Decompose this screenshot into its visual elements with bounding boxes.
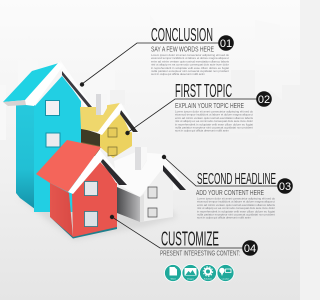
red side wall (50, 183, 73, 237)
subheading: SAY A FEW WORDS HERE (151, 44, 214, 54)
badge 01: 01 (220, 38, 232, 50)
shadow under houses (18, 195, 178, 240)
red front wall (72, 162, 117, 237)
body text: enim ad minim veniam quis nostrud exercitation ullamco laboris (175, 116, 254, 120)
body text: eiusmod tempor incididunt ut labore et dolore magna aliqua ut (175, 113, 253, 117)
callout line 3 (162, 155, 280, 186)
body text: enim ad minim veniam quis nostrud exercitation ullamco laboris (151, 59, 230, 63)
subheading: EXPLAIN YOUR TOPIC HERE (175, 101, 244, 110)
blue fascia (25, 62, 63, 106)
body text: sunt in culpa qui officia deserunt mollit anim (197, 216, 252, 220)
body text: nulla pariatur excepteur sint occaecat cupidatat non proident (175, 126, 253, 130)
white windows (148, 187, 157, 217)
heading: FIRST TOPIC (175, 81, 232, 101)
yellow windows (108, 128, 117, 156)
icon: document: Word (171, 278, 175, 280)
red underside edge (50, 217, 117, 238)
subheading: PRESENT INTERESTING CONTENT: (160, 248, 240, 258)
badge 04: 04 (244, 243, 256, 255)
badge 02: 02 (258, 94, 270, 106)
blue windows (46, 100, 60, 116)
body text: nulla pariatur excepteur sint occaecat cupidatat non proident (197, 212, 275, 216)
blue front wall (34, 76, 81, 212)
white front wall (140, 168, 173, 222)
body text (197, 196, 276, 220)
white chimney (135, 147, 147, 170)
icon: gear: Solutions (204, 278, 212, 280)
section: customize: CUSTOMIZE (161, 228, 219, 250)
red fascia (68, 149, 103, 194)
red windows (84, 182, 98, 196)
section: second headline (196, 171, 293, 220)
body text: sunt in culpa qui officia deserunt mollit anim (175, 129, 230, 133)
yellow chimney (96, 94, 107, 115)
house: white (114, 147, 186, 222)
house: red (36, 140, 128, 238)
body text: Lorem ipsum dolor sit amet consectetur adipiscing elit sed do (197, 196, 275, 200)
body text: nisi ut aliquip ex ea commodo consequat duis aute irure dolor (175, 119, 253, 123)
icon: pin: Location (222, 278, 229, 280)
body text: nisi ut aliquip ex ea commodo consequat duis aute irure dolor (151, 63, 229, 67)
body text: Lorem ipsum dolor sit amet consectetur adipiscing elit sed do (175, 110, 253, 114)
callout line 4 (110, 215, 244, 248)
city skyline (0, 15, 300, 148)
yellow right roof (121, 103, 139, 133)
body text (175, 110, 254, 133)
body text: nisi ut aliquip ex ea commodo consequat duis aute irure dolor (197, 206, 275, 210)
white roof (114, 152, 186, 198)
white dark underside (163, 165, 186, 190)
section: first topic (175, 81, 272, 133)
callout line 1 (80, 43, 220, 86)
house: blue (3, 60, 93, 212)
house: yellow (80, 94, 139, 158)
section: conclusion (151, 25, 234, 76)
red right roof (100, 150, 128, 185)
blue roof plane (3, 63, 59, 102)
callout line 2 (126, 99, 258, 135)
heading: CONCLUSION (151, 25, 213, 45)
white side wall (117, 187, 140, 222)
blue right roof (60, 60, 93, 107)
yellow dark side (81, 128, 100, 156)
body text: sunt in culpa qui officia deserunt mollit anim (151, 72, 206, 76)
body text: eiusmod tempor incididunt ut labore et dolore magna aliqua ut (151, 56, 229, 60)
subheading: ADD YOUR CONTENT HERE (196, 188, 264, 197)
body text: in reprehenderit in voluptate velit esse cillum dolore eu fugiat (175, 122, 253, 126)
body text: eiusmod tempor incididunt ut labore et dolore magna aliqua ut (197, 200, 275, 204)
body text (151, 53, 230, 76)
yellow roof plane (80, 103, 120, 132)
section: customize (160, 228, 258, 282)
body text: nulla pariatur excepteur sint occaecat cupidatat non proident (151, 69, 229, 73)
red roof plane (36, 140, 101, 192)
body text: in reprehenderit in voluptate velit esse cillum dolore eu fugiat (151, 66, 229, 70)
badge 03: 03 (279, 181, 291, 193)
icon: image: Images (187, 278, 194, 280)
yellow front wall (100, 114, 132, 158)
body text: Lorem ipsum dolor sit amet consectetur adipiscing elit sed do (151, 53, 229, 57)
blue side wall (16, 105, 39, 212)
yellow fascia (97, 103, 123, 135)
body text: in reprehenderit in voluptate velit esse cillum dolore eu fugiat (197, 209, 275, 213)
body text: enim ad minim veniam quis nostrud exercitation ullamco laboris (197, 203, 276, 207)
